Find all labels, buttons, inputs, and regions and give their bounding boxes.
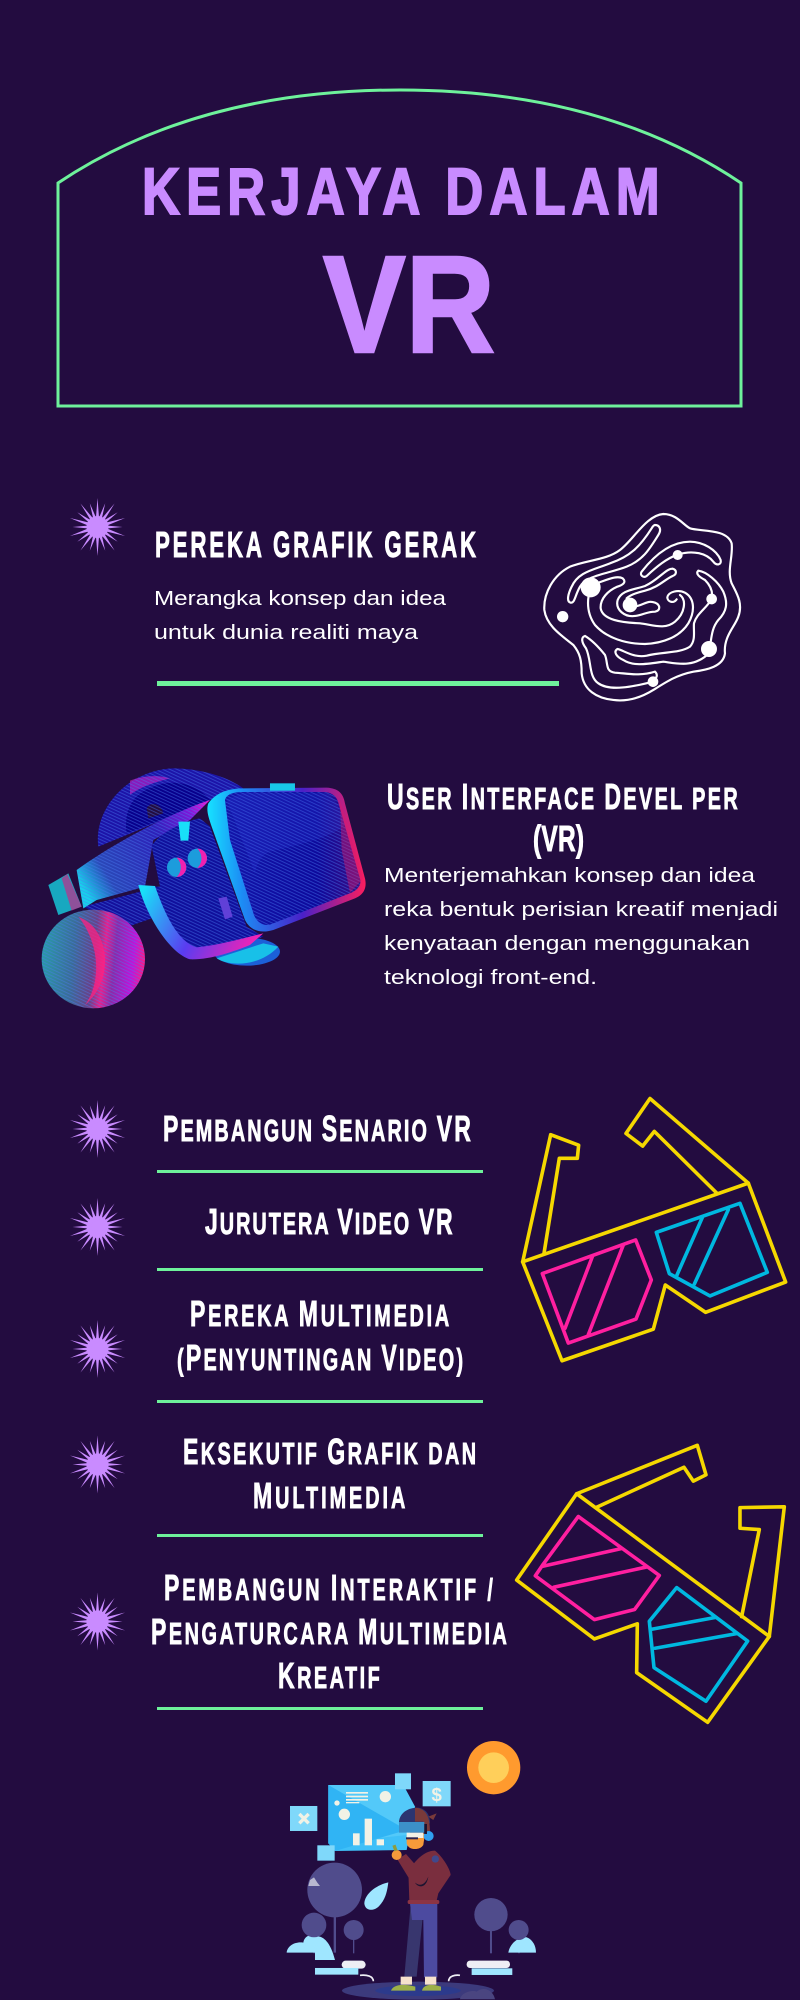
heading: (VR) [533, 818, 584, 859]
title [142, 154, 660, 382]
heading: PEREKA GRAFIK GERAK [155, 526, 476, 565]
list item: Pembangun Interaktif / Pengaturcara Multimedia Kreatif [69, 1569, 507, 1710]
virtual screen: $ [431, 1784, 442, 1805]
divider line [157, 681, 559, 686]
ground shadow [342, 1982, 495, 2000]
list item: Pembangun Senario VR: PEMBANGUN SENARIO VR [163, 1110, 471, 1149]
illustration: VR headset [42, 768, 366, 1008]
icon: 3D glasses bottom [517, 1445, 784, 1722]
list item: Eksekutif Grafik dan Multimedia: MULTIMEDIA [253, 1477, 405, 1516]
title line: Kerjaya dalam: KERJAYA DALAM [142, 154, 660, 228]
description: untuk dunia realiti maya [154, 622, 419, 644]
list item: Pembangun Interaktif / Pengaturcara Multimedia Kreatif: PEMBANGUN INTERAKTIF / [164, 1569, 493, 1608]
list item: Pembangun Interaktif / Pengaturcara Multimedia Kreatif: KREATIF [278, 1657, 380, 1696]
list item: Eksekutif Grafik dan Multimedia: EKSEKUTIF GRAFIK DAN [183, 1433, 476, 1472]
icon: starburst [69, 498, 126, 556]
list item: Jurutera Video VR: JURUTERA VIDEO VR [205, 1203, 453, 1242]
title line: VR: VR [323, 228, 495, 382]
list item: Pereka Multimedia: PEREKA MULTIMEDIA [190, 1295, 449, 1334]
list item: Pereka Multimedia: (PENYUNTINGAN VIDEO) [177, 1339, 463, 1378]
panel: job list [69, 1100, 507, 1710]
heading: USER INTERFACE DEVEL PER [387, 778, 738, 817]
description: Merangka konsep dan idea [154, 588, 447, 610]
description: kenyataan dengan menggunakan [384, 933, 750, 955]
icon: sun [467, 1741, 520, 1794]
icon: organic maze blob [544, 514, 740, 700]
panel: User Interface Developer [42, 768, 778, 1008]
list item: Pembangun Senario VR [69, 1100, 483, 1173]
heading [387, 778, 738, 859]
trees and clouds [287, 1863, 536, 1981]
list item: Eksekutif Grafik dan Multimedia [69, 1433, 483, 1537]
illustration: person in VR headset [287, 1741, 536, 2000]
list item: Jurutera Video VR [69, 1198, 483, 1271]
virtual screen [290, 1773, 451, 1861]
description: teknologi front-end. [384, 967, 597, 989]
list item: Pembangun Interaktif / Pengaturcara Multimedia Kreatif: PENGATURCARA MULTIMEDIA [151, 1613, 507, 1652]
person [391, 1808, 451, 1991]
description: reka bentuk perisian kreatif menjadi [384, 899, 778, 921]
icon: 3D glasses top [523, 1099, 786, 1361]
description: Menterjemahkan konsep dan idea [384, 865, 756, 887]
panel: Pereka Grafik Gerak [69, 498, 740, 700]
description [384, 865, 778, 989]
description [154, 588, 447, 644]
title frame [58, 90, 741, 406]
list item: Pereka Multimedia [69, 1295, 483, 1403]
